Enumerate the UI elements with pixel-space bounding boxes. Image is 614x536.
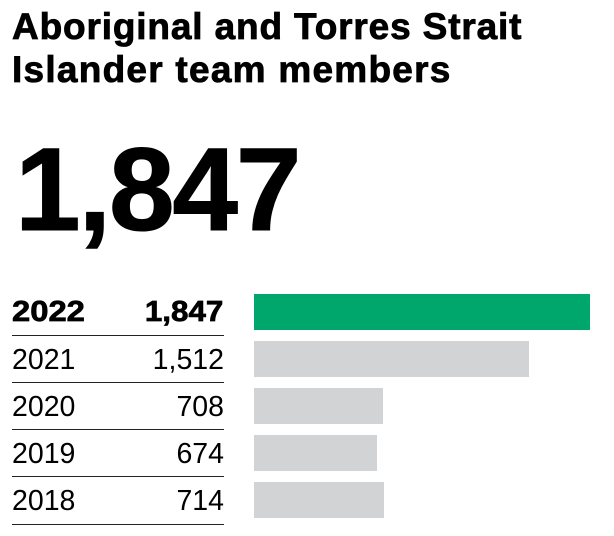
bar chart	[254, 294, 590, 518]
row 2021: 2021	[12, 344, 75, 376]
row 2018: 714	[176, 485, 224, 517]
row 2022: 1,847	[145, 296, 223, 328]
row 2020: 708	[176, 391, 224, 423]
row 2018: 2018	[12, 485, 75, 517]
data table	[12, 296, 224, 525]
row 2020: 2020	[12, 391, 75, 423]
title	[12, 6, 522, 90]
bar 2022	[254, 294, 590, 330]
row 2021	[12, 344, 224, 383]
row 2022	[12, 296, 224, 336]
row 2018	[12, 485, 224, 525]
title: Islander team members	[12, 49, 452, 90]
row 2020	[12, 391, 224, 430]
row 2021: 1,512	[153, 344, 224, 376]
row 2019: 674	[176, 438, 224, 470]
row 2022: 2022	[12, 296, 85, 328]
row 2019	[12, 438, 224, 477]
headline number: 1,847	[15, 124, 299, 256]
bar 2021	[254, 341, 529, 377]
row 2019: 2019	[12, 438, 75, 470]
bar 2020	[254, 388, 383, 424]
bar 2019	[254, 435, 377, 471]
title: Aboriginal and Torres Strait	[12, 6, 522, 47]
bar 2018	[254, 482, 384, 518]
